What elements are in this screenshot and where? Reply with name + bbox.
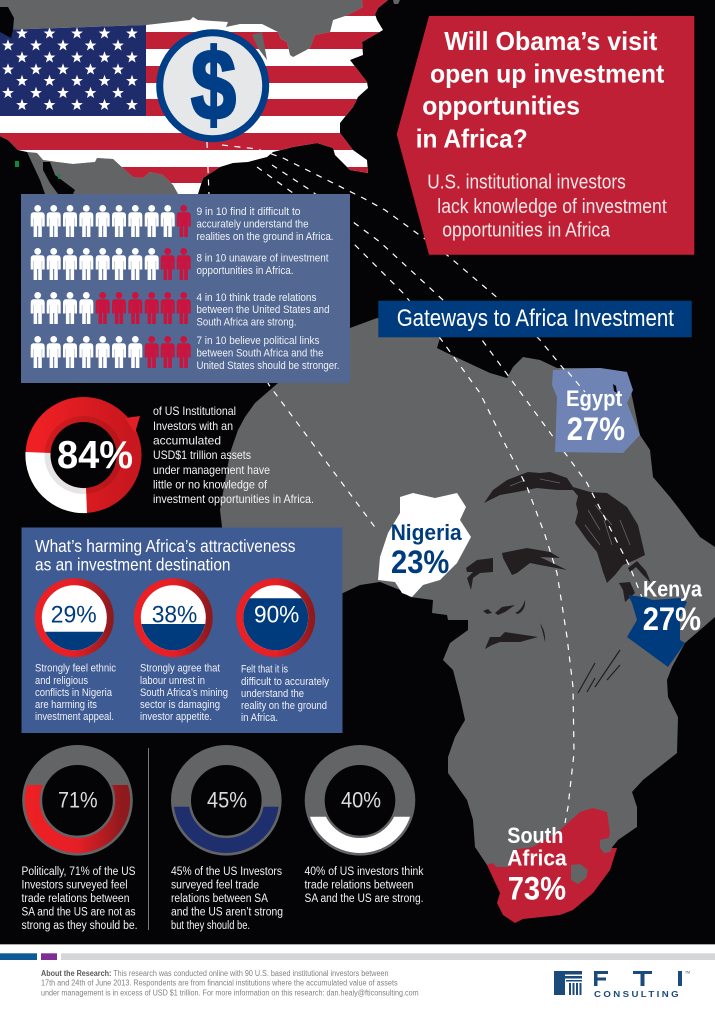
text: 84% explanation: little or no knowledge of: [153, 478, 268, 492]
caption: 90%: reality on the ground: [241, 700, 327, 712]
country: Nigeria 23%: Nigeria: [391, 520, 462, 545]
about the research text: 17th and 24th of June 2013. Respondents are from financial institutions where the accumulated value of assets: [41, 979, 398, 988]
row: 4 in 10: South Africa are strong.: [196, 316, 296, 328]
subheading: [427, 171, 667, 242]
country: South Africa 73%: Africa: [507, 846, 567, 871]
caption: 40%: 40% of US investors think: [304, 866, 424, 878]
caption: 71%: SA and the US are not as: [22, 906, 136, 918]
map: Africa continent with Obama face: [220, 318, 715, 880]
country: Kenya 27%: Kenya: [643, 577, 702, 602]
row: 8 in 10: [31, 248, 328, 280]
row: 7 in 10: 7 in 10 believe political links: [196, 335, 320, 347]
caption: 71%: Investors surveyed feel: [22, 880, 128, 892]
caption: 45%: and the US aren’t strong: [171, 906, 283, 918]
footer: [0, 944, 715, 1011]
caption: 90%: understand the: [241, 688, 304, 700]
donut: 71%: [32, 755, 123, 846]
map: Alaska notch: [0, 7, 14, 38]
gauge: 38%: [137, 582, 209, 654]
panel: What's harming Africa's attractiveness: [22, 528, 342, 733]
face: mouth: [485, 623, 545, 649]
row: 9 in 10: realities on the ground in Africa.: [196, 231, 334, 243]
gauge: 29%: [38, 582, 110, 654]
caption: 38%: South Africa’s mining: [140, 687, 228, 699]
country: South Africa 73%: [487, 808, 617, 923]
donut: 40%: [315, 755, 405, 846]
caption: 90%: [241, 664, 329, 724]
about the research text: About the Research: This research was conducted online with 90 U.S. based institutional investors between: [41, 969, 388, 978]
donut: 45%: 45%: [207, 788, 247, 813]
headline: opportunities: [422, 90, 580, 120]
row: 4 in 10: [31, 292, 329, 328]
gauge: 29%: 29%: [51, 602, 97, 629]
donut: 71%: 71%: [58, 788, 98, 813]
caption: 71%: Politically, 71% of the US: [22, 866, 136, 878]
caption: 29%: investment appeal.: [35, 711, 114, 723]
caption: 29%: and religious: [35, 675, 88, 687]
face: chin lines: [578, 650, 620, 693]
panel heading: What’s harming Africa’s attractiveness: [35, 536, 296, 556]
text: 84% explanation: accumulated: [153, 434, 221, 448]
panel: Gateways heading: [378, 301, 692, 337]
caption: 29%: [35, 663, 116, 723]
caption: 38%: investor appetite.: [140, 711, 212, 723]
country: Egypt 27%: Egypt: [566, 386, 623, 411]
donut: 40%: 40%: [341, 788, 381, 813]
text: 84% explanation: of US Institutional: [153, 404, 236, 418]
face: hair texture: [510, 479, 630, 545]
gauge: 38%: 38%: [152, 602, 197, 629]
headline: [416, 26, 665, 154]
map: North America landmass: [0, 0, 400, 194]
caption: 40%: [304, 866, 424, 905]
country: South Africa 73%: 73%: [508, 870, 566, 906]
row: 4 in 10: 4 in 10 think trade relations: [196, 292, 317, 304]
caption: 71%: [22, 866, 138, 932]
row: 4 in 10: between the United States and: [196, 304, 330, 316]
text: 84% explanation: USD$1 trillion assets: [153, 448, 251, 462]
caption: 45%: 45% of the US Investors: [171, 866, 282, 878]
row: 9 in 10: [31, 205, 333, 243]
country: Nigeria 23%: 23%: [391, 544, 449, 580]
caption: 38%: [140, 663, 228, 723]
caption: 40%: trade relations between: [304, 880, 414, 892]
subheading: U.S. institutional investors: [427, 171, 626, 193]
caption: 40%: SA and the US are strong.: [304, 893, 424, 905]
subheading: lack knowledge of investment: [437, 196, 667, 218]
face: nose: [483, 600, 525, 615]
panel: investor knowledge pictograms: [21, 194, 350, 383]
headline: Will Obama’s visit: [444, 26, 658, 56]
caption: 71%: strong as they should be.: [22, 920, 138, 932]
caption: 45%: [171, 866, 283, 932]
gauge: 90%: 90%: [254, 602, 299, 629]
headline: in Africa?: [416, 124, 528, 154]
text: 84% explanation: investment opportunities in Africa.: [153, 492, 314, 506]
caption: 38%: sector is damaging: [140, 699, 220, 711]
caption: 90%: in Africa.: [241, 712, 278, 724]
country: Egypt 27%: [552, 368, 640, 453]
caption: 45%: but they should be.: [171, 920, 250, 932]
country: Nigeria 23%: [378, 493, 471, 597]
country: Kenya 27%: [627, 577, 702, 667]
row: 9 in 10: accurately understand the: [196, 218, 308, 230]
panel heading: as an investment destination: [35, 554, 230, 574]
face: eyebrows: [466, 548, 567, 590]
dollar coin icon: [160, 29, 266, 141]
row: 7 in 10: [31, 335, 339, 372]
caption: 29%: Strongly feel ethnic: [35, 663, 116, 675]
caption: 45%: surveyed feel trade: [171, 880, 259, 892]
row: 8 in 10: opportunities in Africa.: [196, 265, 294, 277]
FTI Consulting logo: [554, 970, 690, 999]
headline panel: [397, 16, 694, 255]
dollar coin icon: $: [191, 29, 236, 141]
caption: 38%: Strongly agree that: [140, 663, 220, 675]
panel heading: [35, 536, 296, 574]
flag map of the USA: [0, 0, 400, 200]
country: Egypt 27%: 27%: [567, 411, 625, 447]
caption: 71%: trade relations between: [22, 893, 130, 905]
caption: 45%: relations between SA: [171, 893, 268, 905]
country: Kenya 27%: 27%: [643, 601, 701, 637]
country: South Africa 73%: South: [507, 823, 563, 848]
subheading: opportunities in Africa: [442, 220, 611, 242]
text: 84% explanation: Investors with an: [153, 419, 233, 433]
caption: 29%: conflicts in Nigeria: [35, 687, 113, 699]
caption: 29%: are harming its: [35, 699, 97, 711]
about the research text: under management is in excess of USD $1 trillion. For more information on this research: dan.healy@fticonsulting.com: [41, 988, 419, 998]
row: 7 in 10: United States should be stronger.: [196, 360, 340, 372]
caption: 38%: labour unrest in: [140, 675, 205, 687]
row: 8 in 10: 8 in 10 unaware of investment: [196, 253, 328, 265]
headline: open up investment: [430, 58, 665, 88]
text: 84% explanation: under management have: [153, 463, 270, 477]
gauge: 90%: [240, 582, 312, 654]
about the research text: [41, 969, 419, 998]
row: 9 in 10: 9 in 10 find it difficult to: [196, 206, 300, 218]
face: ear: [619, 561, 651, 602]
FTI Consulting logo: TM: [685, 970, 690, 974]
FTI Consulting logo: CONSULTING: [594, 990, 681, 999]
caption: 90%: Felt that it is: [241, 664, 288, 676]
caption: 90%: difficult to accurately: [241, 676, 329, 688]
donut: 45%: [181, 755, 272, 846]
row: 7 in 10: between South Africa and the: [196, 348, 324, 360]
donut chart: 84%: [25, 410, 140, 513]
donut chart: 84%: 84%: [57, 434, 133, 477]
dashed route lines from the US to Africa: [207, 142, 643, 823]
text: 84% explanation: [153, 404, 314, 506]
face: hair: [484, 472, 645, 583]
